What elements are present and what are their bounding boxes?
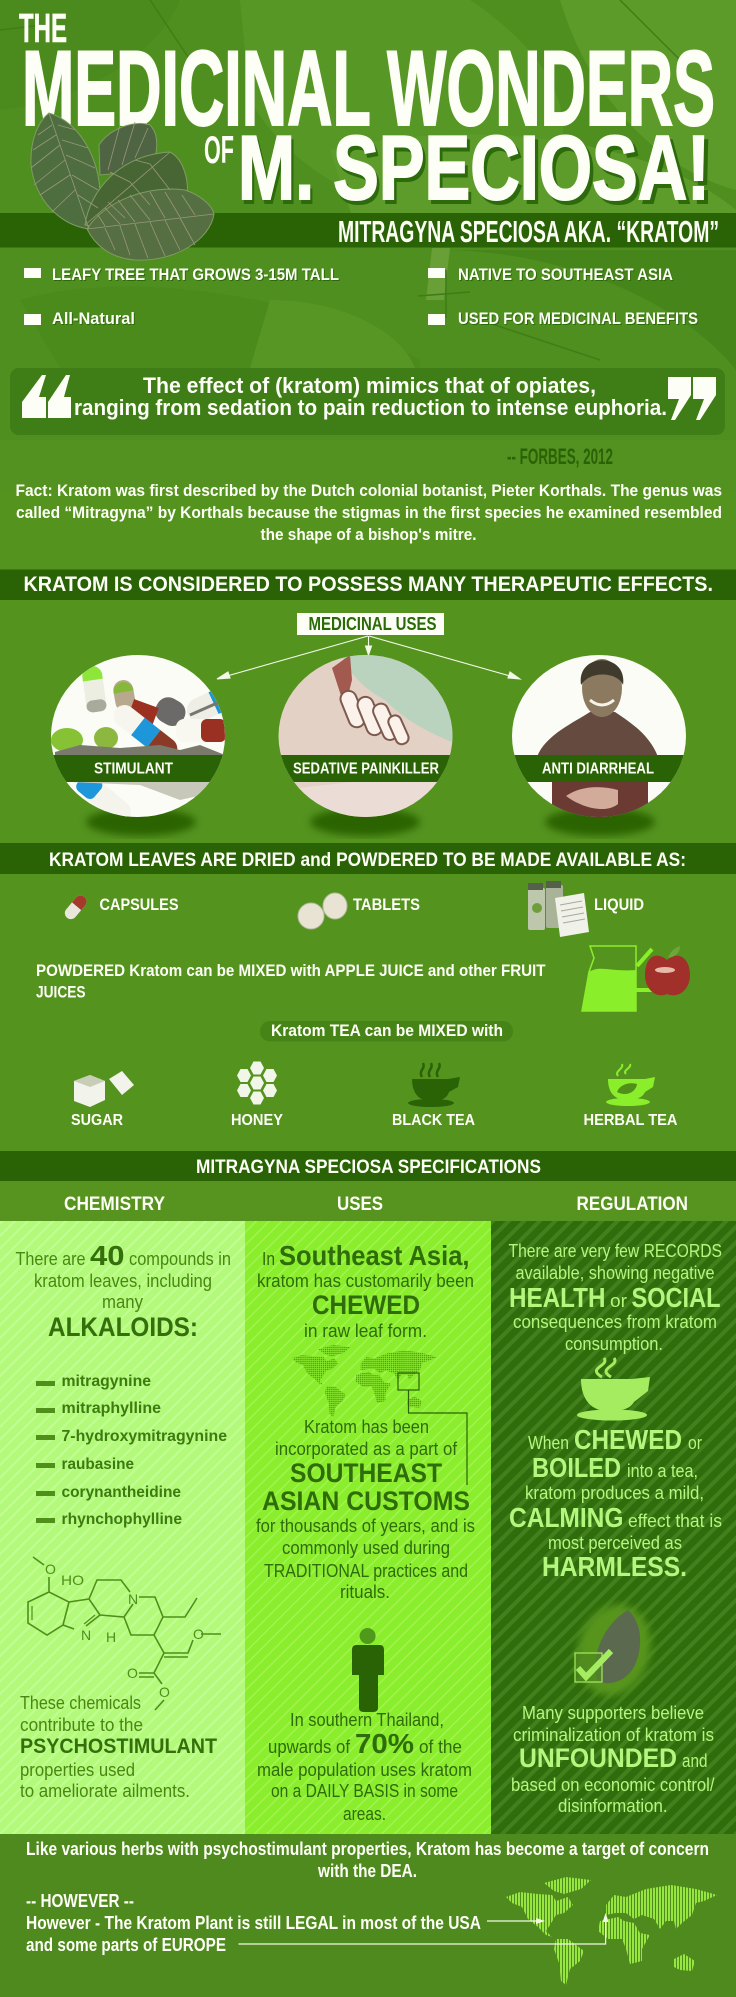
sedative label: SEDATIVE PAINKILLER <box>293 760 439 778</box>
chewed text: or <box>688 1433 702 1453</box>
alkaloid list: mitraphylline <box>62 1400 161 1417</box>
chewed text: HARMLESS. <box>542 1551 687 1582</box>
customs text: rituals. <box>340 1582 390 1602</box>
customs text <box>256 1417 475 1602</box>
circle: anti diarrheal <box>510 650 688 820</box>
icon: kratom leaves <box>31 113 214 260</box>
molecule diagram: H <box>106 1629 116 1645</box>
supporters text: and <box>682 1751 708 1771</box>
bullet: leafy tree: LEAFY TREE THAT GROWS 3-15M TALL <box>53 266 340 285</box>
icon: pitcher and apple <box>582 946 690 1011</box>
herbal tea <box>584 1064 678 1129</box>
alkaloid list <box>36 1373 227 1528</box>
closing text: PSYCHOSTIMULANT <box>20 1734 217 1758</box>
bullet: leafy tree: LEAFY TREE THAT GROWS 3-15M TALL <box>52 265 339 284</box>
alkaloid list: rhynchophylline <box>62 1511 182 1528</box>
southeast asia text: kratom has customarily been <box>257 1271 474 1291</box>
icon: pills <box>51 665 230 827</box>
icon: man holding stomach <box>530 659 662 820</box>
southeast asia text <box>257 1240 474 1341</box>
molecule diagram <box>28 1557 221 1710</box>
panel: chemistry <box>0 1221 245 1834</box>
footer text <box>26 1839 709 1955</box>
powdered kratom text <box>36 961 546 1002</box>
southeast asia text: in raw leaf form. <box>304 1321 427 1341</box>
anti diarrheal label: ANTI DIARRHEAL <box>542 760 654 778</box>
thailand text: upwards of <box>268 1737 351 1757</box>
background leaf photo texture <box>0 0 736 490</box>
herbal tea: HERBAL TEA <box>584 1112 678 1129</box>
bullet: all natural: All-Natural <box>53 310 136 329</box>
customs text: SOUTHEAST <box>290 1458 442 1488</box>
honey <box>231 1062 283 1129</box>
intro text: compounds in <box>129 1249 231 1269</box>
alkaloid list: raubasine <box>62 1456 134 1473</box>
feature bullets <box>24 265 699 329</box>
bullet: medicinal: USED FOR MEDICINAL BENEFITS <box>459 310 699 329</box>
intro text: many <box>102 1292 143 1312</box>
chewed text: When <box>528 1433 569 1453</box>
quote text <box>74 373 667 420</box>
icon: person <box>352 1628 384 1712</box>
chewed text: most perceived as <box>548 1533 682 1553</box>
footer text: and some parts of EUROPE <box>26 1935 226 1955</box>
closing text <box>20 1693 217 1801</box>
world map <box>506 1877 717 1985</box>
bullet: native: NATIVE TO SOUTHEAST ASIA <box>459 266 674 285</box>
southeast asia text: CHEWED <box>312 1290 420 1320</box>
fact text <box>16 481 722 544</box>
quote box <box>10 368 725 435</box>
intro text <box>16 1240 231 1342</box>
quote text: The effect of (kratom) mimics that of opiates, <box>143 373 596 398</box>
arrows from medicinal uses <box>217 636 520 679</box>
thailand text <box>257 1710 472 1824</box>
thailand text: of the <box>419 1737 462 1757</box>
world map <box>292 1345 437 1417</box>
records text <box>508 1241 722 1354</box>
thailand text: areas. <box>343 1804 386 1824</box>
records text: consequences from kratom <box>513 1312 717 1332</box>
records text: available, showing negative <box>516 1263 714 1283</box>
quote attribution: -- FORBES, 2012 <box>507 444 613 469</box>
powdered kratom text: JUICES <box>36 982 86 1002</box>
thailand text: male population uses kratom <box>257 1760 472 1780</box>
arrow: europe <box>238 1913 609 1944</box>
molecule diagram: O <box>45 1561 56 1577</box>
icon: black tea cup <box>408 1063 460 1107</box>
thailand text: 70% <box>355 1728 414 1759</box>
customs text: TRADITIONAL practices and <box>264 1561 468 1581</box>
molecule diagram: O <box>159 1684 170 1700</box>
icon: tablets <box>298 893 347 929</box>
chewed text <box>509 1424 722 1582</box>
chewed text: CHEWED <box>574 1424 682 1455</box>
alkaloid list: corynantheidine <box>62 1484 181 1501</box>
customs text: for thousands of years, and is <box>256 1516 475 1536</box>
circle labels band <box>50 755 688 782</box>
header: chemistry: CHEMISTRY <box>64 1193 165 1215</box>
customs text: incorporated as a part of <box>275 1439 458 1459</box>
footer text: with the DEA. <box>317 1861 417 1881</box>
molecule diagram: O <box>193 1626 204 1642</box>
sugar: SUGAR <box>71 1112 123 1129</box>
thailand text: on a DAILY BASIS in some <box>271 1781 458 1801</box>
chewed text: effect that is <box>628 1511 722 1531</box>
fact text: the shape of a bishop's mitre. <box>260 525 476 544</box>
molecule diagram: N <box>81 1627 91 1643</box>
panel: uses <box>245 1221 491 1834</box>
icon: herbal tea cup <box>606 1064 655 1106</box>
icon: opening quote mark <box>22 375 71 418</box>
chewed text: into a tea, <box>627 1461 698 1481</box>
quote text: ranging from sedation to pain reduction to intense euphoria. <box>74 395 667 420</box>
supporters text: Many supporters believe <box>522 1703 704 1723</box>
icon: leaf with check mark <box>567 1596 661 1704</box>
icon: hand <box>332 655 410 746</box>
icon: honeycomb <box>237 1062 277 1104</box>
supporters text <box>511 1703 714 1816</box>
intro text: There are <box>16 1249 86 1269</box>
alkaloid list: 7-hydroxymitragynine <box>62 1428 227 1445</box>
liquid <box>528 881 644 937</box>
header: uses: USES <box>337 1193 383 1215</box>
molecule diagram: N <box>128 1591 138 1607</box>
pill: kratom tea: Kratom TEA can be MIXED with <box>271 1021 503 1040</box>
supporters text: criminalization of kratom is <box>513 1725 714 1745</box>
alkaloid list: mitragynine <box>62 1373 151 1390</box>
title <box>19 5 715 223</box>
supporters text: UNFOUNDED <box>519 1743 677 1773</box>
label: medicinal uses: MEDICINAL USES <box>308 614 436 634</box>
customs text: commonly used during <box>282 1538 450 1558</box>
customs text: ASIAN CUSTOMS <box>262 1486 470 1516</box>
title small word: the: THE <box>19 5 67 51</box>
stimulant label: STIMULANT <box>94 760 173 778</box>
header: regulation: REGULATION <box>576 1193 688 1215</box>
panel: footer <box>0 1834 736 1997</box>
circle shadows <box>86 808 655 836</box>
molecule diagram: O <box>127 1665 138 1681</box>
tablets: TABLETS <box>353 895 420 914</box>
map callout line <box>398 1373 467 1485</box>
anti diarrheal label <box>510 755 688 782</box>
footer text: -- HOWEVER -- <box>26 1891 134 1911</box>
chewed text: BOILED <box>532 1452 621 1483</box>
footer text: However - The Kratom Plant is still LEGAL in most of the USA <box>26 1913 481 1933</box>
icon: bottles and paper <box>528 881 589 937</box>
band: specifications heading: MITRAGYNA SPECIOSA SPECIFICATIONS <box>196 1156 541 1178</box>
icon: capsule <box>62 893 89 922</box>
molecule diagram: HO <box>61 1572 84 1588</box>
panel: regulation <box>491 1221 736 1834</box>
circle: stimulant <box>51 655 225 817</box>
stimulant label <box>50 755 226 782</box>
bullet: all natural: All-Natural <box>52 309 135 328</box>
records text: or <box>610 1291 627 1311</box>
icon: sugar cubes <box>74 1071 134 1107</box>
southeast asia text: Southeast Asia, <box>279 1240 470 1271</box>
supporters text: disinformation. <box>558 1796 668 1816</box>
chewed text: kratom produces a mild, <box>525 1483 704 1503</box>
icon: tea cup <box>577 1358 650 1420</box>
sedative label <box>278 755 454 782</box>
closing text: contribute to the <box>20 1715 143 1735</box>
honey: HONEY <box>231 1112 283 1129</box>
bullet: native: NATIVE TO SOUTHEAST ASIA <box>458 265 673 284</box>
column headers <box>0 1181 736 1221</box>
customs text: Kratom has been <box>304 1417 429 1437</box>
closing text: These chemicals <box>20 1693 141 1713</box>
intro text: ALKALOIDS: <box>48 1312 198 1342</box>
southeast asia text: In <box>262 1249 275 1269</box>
tablets <box>298 893 420 929</box>
intro text: 40 <box>90 1240 124 1271</box>
sugar <box>71 1071 134 1129</box>
bullet: medicinal: USED FOR MEDICINAL BENEFITS <box>458 309 698 328</box>
band: available as heading <box>0 843 736 874</box>
closing text: to ameliorate ailments. <box>20 1781 190 1801</box>
band: subtitle <box>0 213 736 249</box>
icon: closing quote mark <box>668 377 716 420</box>
capsules: CAPSULES <box>100 895 178 914</box>
intro text: kratom leaves, including <box>34 1271 212 1291</box>
arrow: usa <box>487 1918 545 1924</box>
closing text: properties used <box>20 1760 135 1780</box>
powdered kratom text: POWDERED Kratom can be MIXED with APPLE JUICE and other FRUIT <box>36 961 546 980</box>
records text: consumption. <box>565 1334 663 1354</box>
liquid: LIQUID <box>594 895 644 914</box>
capsules <box>62 893 178 922</box>
band: specifications heading <box>0 1151 736 1181</box>
records text: HEALTH <box>509 1282 606 1313</box>
chewed text: CALMING <box>509 1502 624 1533</box>
title small word: of: OF <box>204 129 234 172</box>
black tea <box>392 1063 475 1129</box>
records text: SOCIAL <box>632 1282 720 1313</box>
circle: sedative painkiller <box>278 650 460 820</box>
black tea: BLACK TEA <box>392 1112 475 1129</box>
supporters text: based on economic control/ <box>511 1775 714 1795</box>
thailand text: In southern Thailand, <box>290 1710 444 1730</box>
